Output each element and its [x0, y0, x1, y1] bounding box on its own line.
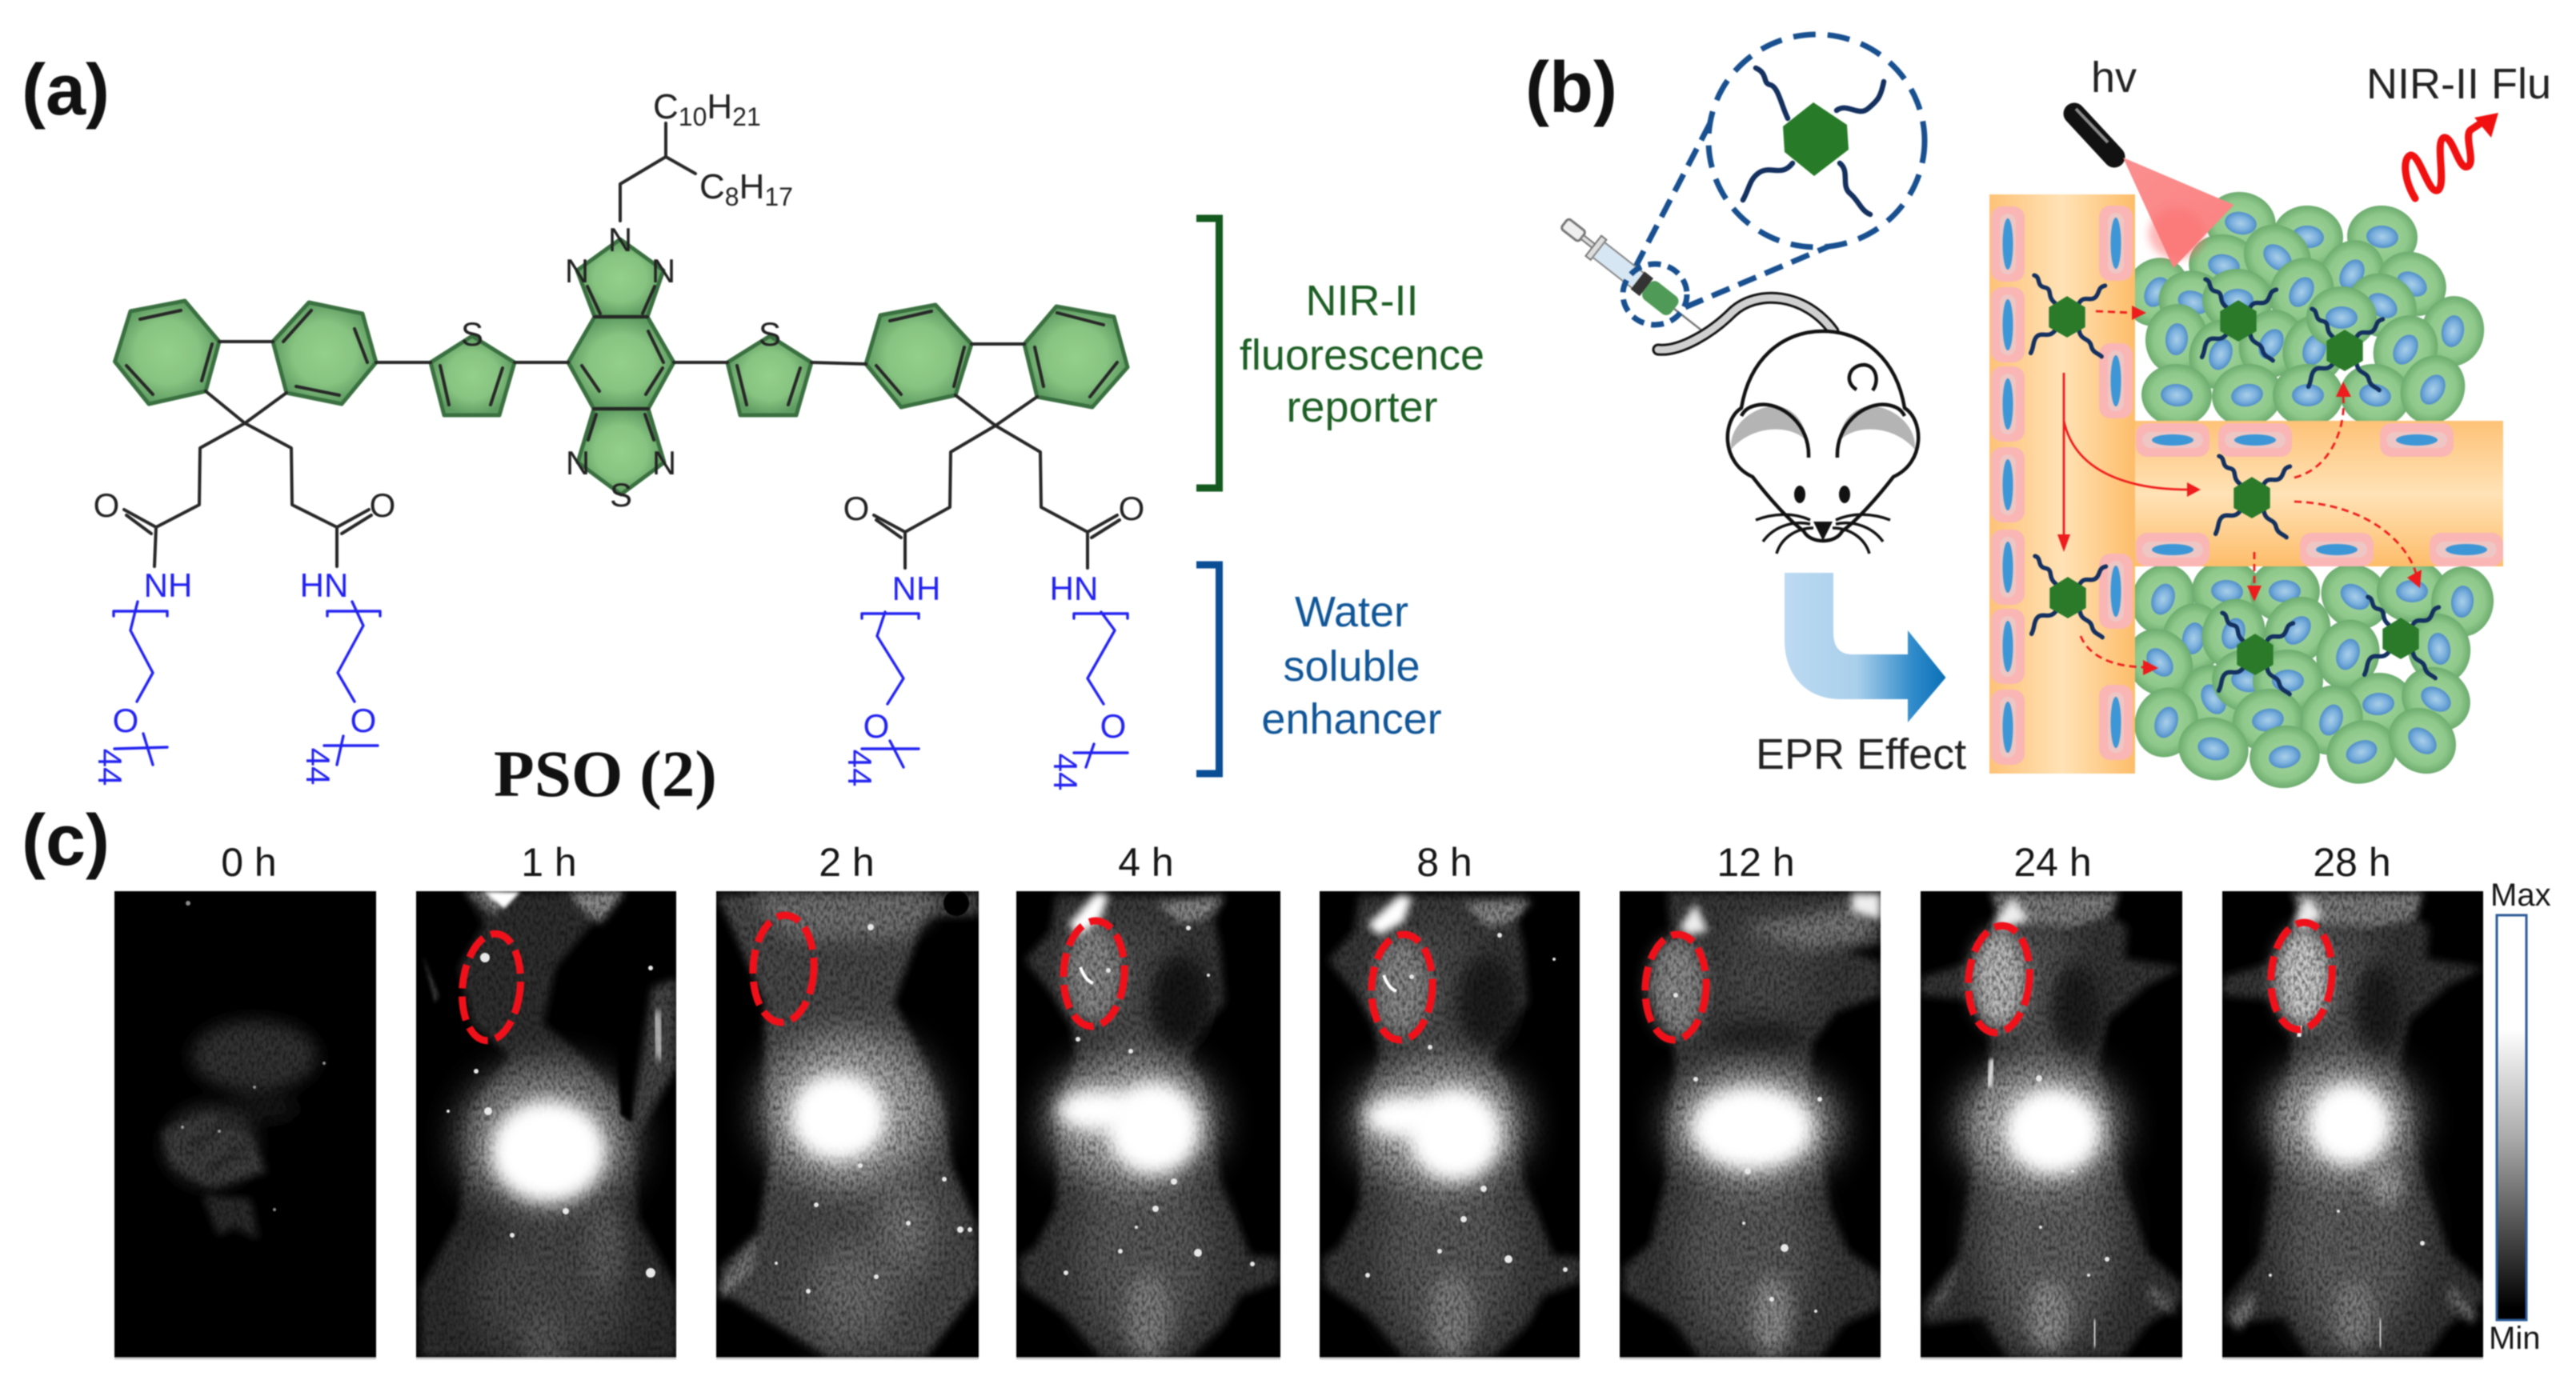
enhancer label: enhancer	[1261, 695, 1442, 743]
core atoms: S	[610, 476, 632, 514]
blue PEG chains: 44	[841, 750, 879, 786]
blue PEG chains: 44	[299, 748, 337, 785]
panel label b: (b)	[1525, 48, 1617, 128]
core atoms: O	[843, 490, 869, 527]
alkyl side chain formulas: H	[707, 87, 732, 126]
time labels: 2 h	[819, 840, 875, 885]
zoom guide lines	[1635, 118, 1827, 307]
core atoms: O	[370, 486, 395, 524]
core atoms: S	[461, 315, 483, 353]
small dashed circle on syringe	[1623, 264, 1687, 325]
panel: b tumor targeting scheme	[1525, 34, 2551, 794]
core atoms: N	[566, 444, 590, 482]
blue PEG chains: O	[863, 707, 889, 745]
alkyl side chain formulas: H	[739, 167, 764, 206]
alkyl side chain formulas: C	[699, 167, 725, 206]
time labels: 28 h	[2313, 840, 2391, 885]
tumor cell clusters	[2112, 186, 2497, 794]
blue PEG chains: 44	[91, 749, 129, 786]
blue PEG chains: O	[351, 702, 376, 739]
core atoms	[94, 221, 1144, 527]
blue PEG chains: NH	[144, 566, 192, 604]
blue bracket	[1196, 565, 1220, 774]
alkyl side chain formulas: 21	[732, 102, 761, 131]
alkyl side chain formulas: 8	[725, 182, 739, 211]
core atoms: N	[652, 444, 676, 482]
icon: laser source	[2074, 109, 2114, 157]
intensity colour bar: Max	[2490, 878, 2551, 913]
image: 12 h	[1618, 890, 1882, 1358]
icon: magnified nanoprobe inset	[1709, 34, 1925, 247]
core atoms: O	[1119, 490, 1144, 527]
time labels: 0 h	[221, 840, 277, 885]
enhancer label: soluble	[1283, 642, 1420, 690]
reporter label: NIR-II	[1306, 277, 1418, 325]
blue PEG chains: O	[113, 702, 138, 739]
image: 1 h	[415, 890, 677, 1358]
core atoms: N	[651, 252, 675, 290]
panel: a molecular structure	[22, 50, 1484, 810]
black bonds	[124, 123, 1120, 568]
alkyl side chain formulas: 10	[679, 102, 707, 131]
blue PEG chains: 44	[1047, 754, 1084, 790]
reporter label: reporter	[1286, 383, 1438, 431]
alkyl side chain formulas	[653, 87, 793, 211]
alkyl side chain formulas: 17	[764, 182, 793, 211]
laser cone	[2123, 158, 2234, 268]
blue PEG chains: HN	[300, 566, 348, 604]
image: 4 h	[1015, 890, 1282, 1358]
time labels: 24 h	[2013, 840, 2092, 885]
core atoms: N	[565, 252, 589, 290]
EPR label: EPR Effect	[1756, 730, 1966, 778]
panel label c: (c)	[22, 801, 110, 881]
core atoms: O	[94, 486, 119, 524]
arrow: fluorescence squiggle	[2406, 113, 2498, 198]
image: 2 h	[715, 890, 980, 1358]
time labels: 8 h	[1416, 840, 1472, 885]
time labels	[221, 840, 2391, 885]
core atoms: S	[759, 315, 781, 353]
intensity colour bar	[2489, 878, 2551, 1356]
green bracket	[1196, 218, 1220, 488]
tumor region markers	[457, 914, 2336, 1043]
time labels: 12 h	[1717, 840, 1795, 885]
hv label: hv	[2091, 54, 2137, 102]
core atoms: N	[608, 221, 632, 258]
image: 8 h	[1319, 890, 1581, 1358]
image: 28 h	[2221, 890, 2484, 1358]
intensity colour bar: Min	[2489, 1321, 2540, 1356]
blue PEG chains	[91, 566, 1128, 790]
alkyl side chain formulas: C	[653, 87, 679, 126]
reporter label: fluorescence	[1240, 331, 1484, 379]
blue PEG chains: O	[1100, 707, 1126, 745]
red transport arrows	[2057, 306, 2422, 675]
green fluorescent core rings	[115, 239, 1128, 494]
image: 0 h	[114, 890, 378, 1358]
arrow: EPR bend arrow	[1785, 573, 1946, 722]
time labels: 4 h	[1118, 840, 1174, 885]
NIR-II Flu label: NIR-II Flu	[2366, 60, 2551, 108]
blue PEG chains: NH	[892, 570, 940, 607]
icon: syringe	[1556, 213, 1713, 342]
enhancer label: Water	[1295, 588, 1408, 636]
blue PEG chains: HN	[1050, 570, 1098, 607]
image: 24 h	[1919, 890, 2183, 1358]
icon: mouse	[1658, 298, 1918, 554]
time labels: 1 h	[521, 840, 577, 885]
panel: c NIR-II time series	[22, 801, 2551, 1371]
blood vessel	[1989, 194, 2503, 774]
compound name: PSO (2)	[494, 737, 717, 810]
panel label a: (a)	[22, 50, 110, 130]
nanoprobe molecules	[2031, 275, 2439, 694]
